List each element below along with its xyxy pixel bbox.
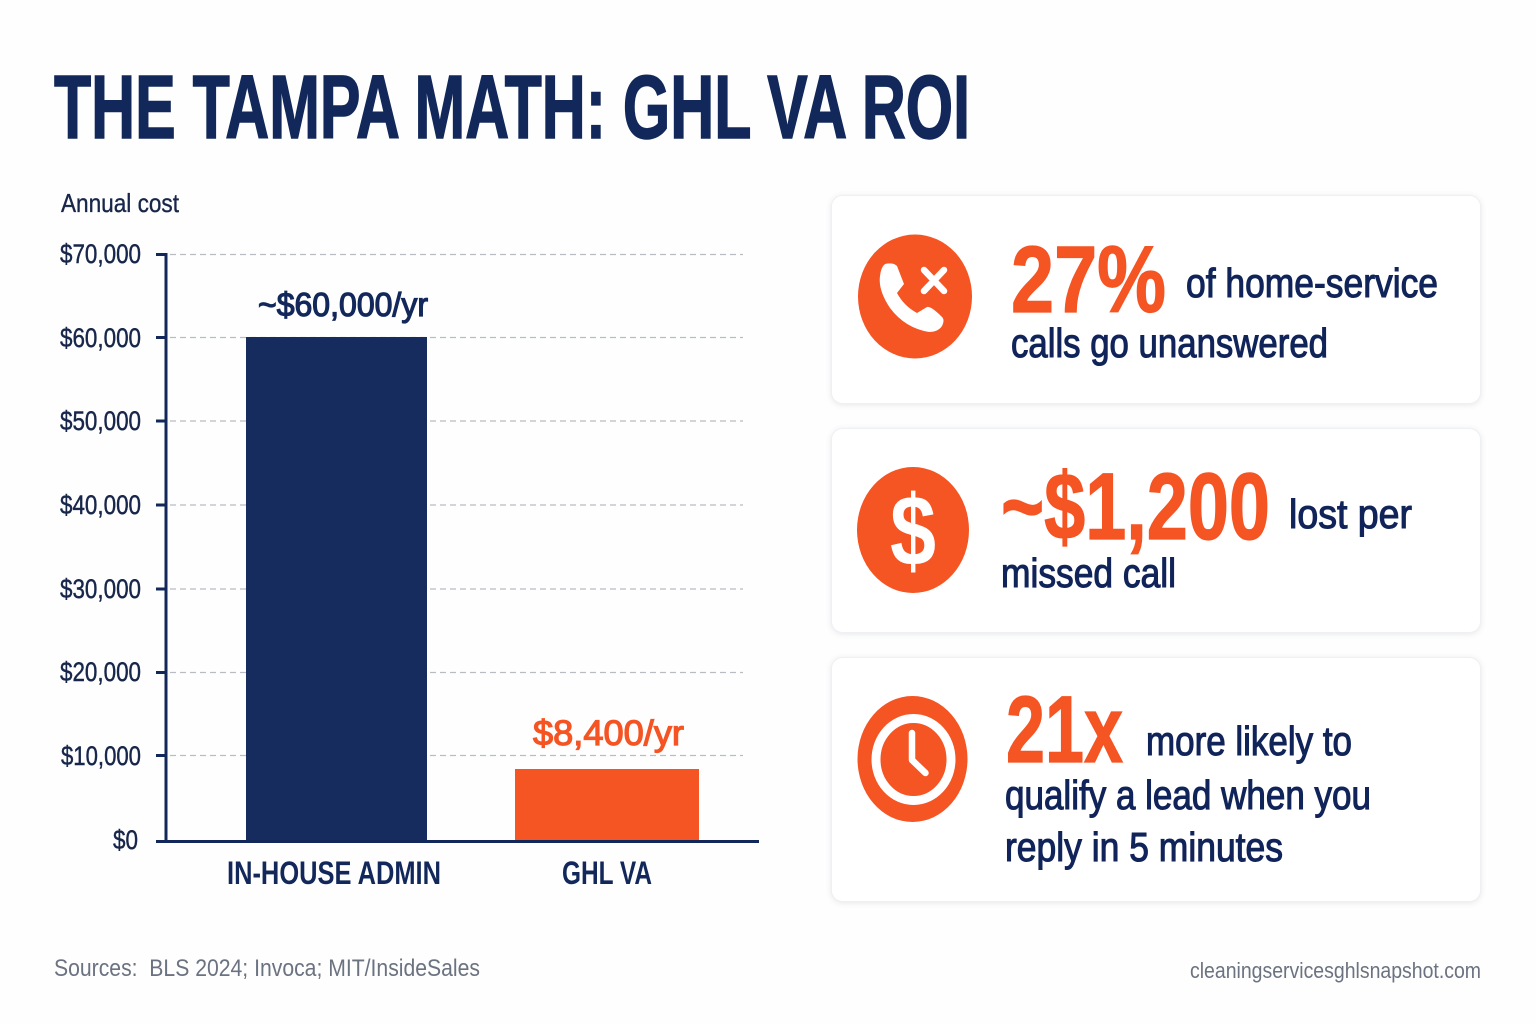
statistic text: reply in 5 minutes bbox=[1005, 824, 1283, 870]
panel: unanswered calls bbox=[832, 196, 1480, 404]
bar: GHL VA bbox=[515, 769, 699, 841]
category label: GHL VA: GHL VA bbox=[562, 855, 652, 891]
statistic: 21x: 21x bbox=[1006, 677, 1123, 783]
y-axis labels: $40,000 bbox=[60, 490, 141, 520]
statistic text: more likely to bbox=[1146, 718, 1352, 764]
statistic: 27%: 27% bbox=[1011, 227, 1166, 333]
y-axis labels: $30,000 bbox=[60, 574, 141, 604]
website: cleaningservicesghlsnapshot.com bbox=[1190, 958, 1481, 983]
y-axis labels: $10,000 bbox=[61, 741, 141, 771]
sources: Sources: BLS 2024; Invoca; MIT/InsideSales bbox=[54, 955, 480, 982]
icon: clock bbox=[858, 696, 968, 822]
category label: in-house admin: IN-HOUSE ADMIN bbox=[227, 855, 441, 891]
y-axis labels: $20,000 bbox=[60, 657, 141, 687]
icon: missed call bbox=[858, 234, 972, 358]
bar chart: annual cost bbox=[60, 188, 759, 891]
icon: dollar bbox=[857, 467, 969, 593]
statistic text: qualify a lead when you bbox=[1005, 772, 1371, 818]
bar: in-house admin bbox=[246, 337, 427, 841]
y-axis labels bbox=[60, 239, 141, 855]
bar value: GHL VA: $8,400/yr bbox=[533, 714, 684, 753]
statistic text: lost per bbox=[1289, 491, 1412, 537]
axis title: Annual cost bbox=[61, 188, 180, 218]
axes bbox=[156, 254, 759, 842]
y-axis labels: $0 bbox=[113, 825, 138, 855]
statistic text: calls go unanswered bbox=[1011, 320, 1328, 366]
title: THE TAMPA MATH: GHL VA ROI bbox=[54, 58, 970, 158]
statistic text: of home-service bbox=[1186, 260, 1438, 306]
panel: lost revenue bbox=[832, 428, 1480, 632]
y-axis labels: $50,000 bbox=[60, 406, 141, 436]
y-axis labels: $70,000 bbox=[60, 239, 141, 269]
bar value: in-house admin: ~$60,000/yr bbox=[258, 286, 428, 323]
y-axis labels: $60,000 bbox=[60, 323, 141, 353]
panel: fast response bbox=[832, 658, 1480, 902]
statistic: ~$1,200: ~$1,200 bbox=[1001, 454, 1270, 560]
statistic text bbox=[1005, 718, 1371, 870]
statistic text bbox=[1011, 260, 1438, 366]
icon: dollar: $ bbox=[890, 475, 936, 587]
statistic text: missed call bbox=[1001, 550, 1176, 596]
statistic text bbox=[1001, 491, 1412, 596]
